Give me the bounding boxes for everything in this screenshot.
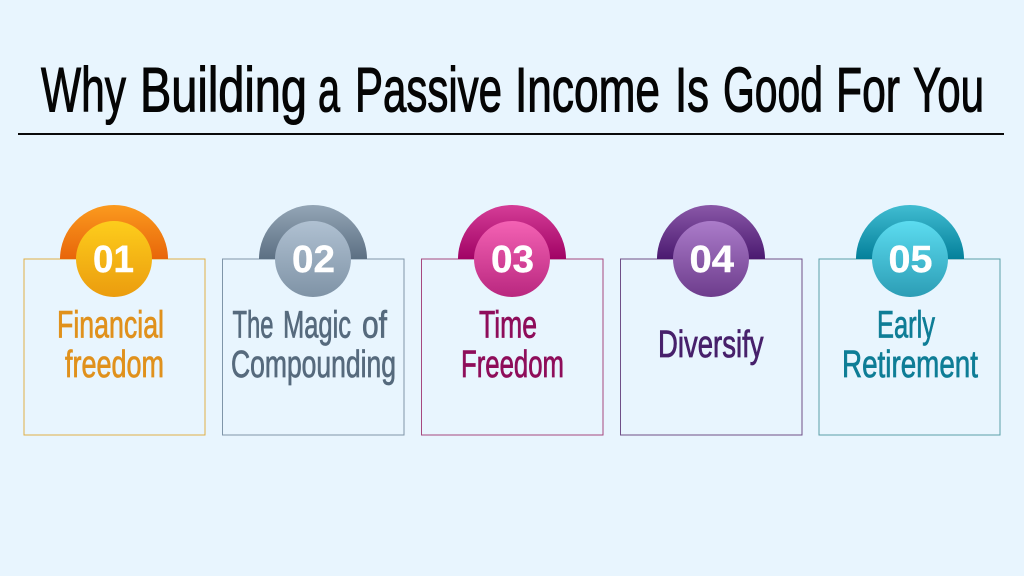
- label: Financial freedom: Financial: [57, 304, 164, 346]
- badge circle 05: [872, 221, 948, 297]
- panel: 05 Early Retirement: [819, 205, 1000, 435]
- label: The Magic of Compounding: Compounding: [231, 344, 396, 386]
- card outline 02: [222, 259, 404, 435]
- label: The Magic of Compounding: of: [362, 304, 387, 346]
- badge arc 04: [657, 205, 765, 259]
- panel: 02 The Magic of Compounding: [222, 205, 404, 435]
- label: Early Retirement: Retirement: [842, 344, 978, 386]
- badge arc 05: [856, 205, 964, 259]
- title: Good: [723, 56, 823, 126]
- card outline 03: [422, 259, 603, 435]
- label: Early Retirement: Early: [877, 304, 935, 346]
- badge circle 01: [76, 221, 152, 297]
- label: Diversify: Diversify: [658, 324, 764, 366]
- title: Passive: [355, 56, 502, 126]
- card outline 05: [819, 259, 1000, 435]
- number 01: 01: [93, 239, 134, 281]
- number 05: 05: [888, 239, 932, 281]
- title: Is: [675, 56, 709, 126]
- title: Why: [41, 56, 126, 126]
- title: Building: [140, 56, 307, 126]
- title: Income: [515, 56, 660, 126]
- badge circle 03: [474, 221, 550, 297]
- label: Financial freedom: freedom: [65, 344, 164, 386]
- title: For: [836, 56, 900, 126]
- label: The Magic of Compounding: Magic: [283, 304, 351, 346]
- card outline 04: [620, 259, 802, 435]
- panel: 01 Financial freedom: [24, 205, 205, 435]
- label: Time Freedom: Freedom: [461, 344, 564, 386]
- badge arc 03: [458, 205, 566, 259]
- panel: 04 Diversify: [620, 205, 802, 435]
- label: The Magic of Compounding: The: [232, 304, 274, 346]
- badge arc 01: [60, 205, 168, 259]
- badge circle 04: [673, 221, 749, 297]
- panel: 03 Time Freedom: [422, 205, 603, 435]
- number 04: 04: [690, 239, 734, 281]
- title: a: [318, 56, 341, 126]
- number 02: 02: [292, 239, 335, 281]
- title underline: [18, 133, 1004, 135]
- title: You: [913, 56, 984, 126]
- card outline 01: [24, 259, 205, 435]
- label: Time Freedom: Time: [479, 304, 537, 346]
- badge circle 02: [275, 221, 351, 297]
- number 03: 03: [491, 239, 534, 281]
- badge arc 02: [259, 205, 367, 259]
